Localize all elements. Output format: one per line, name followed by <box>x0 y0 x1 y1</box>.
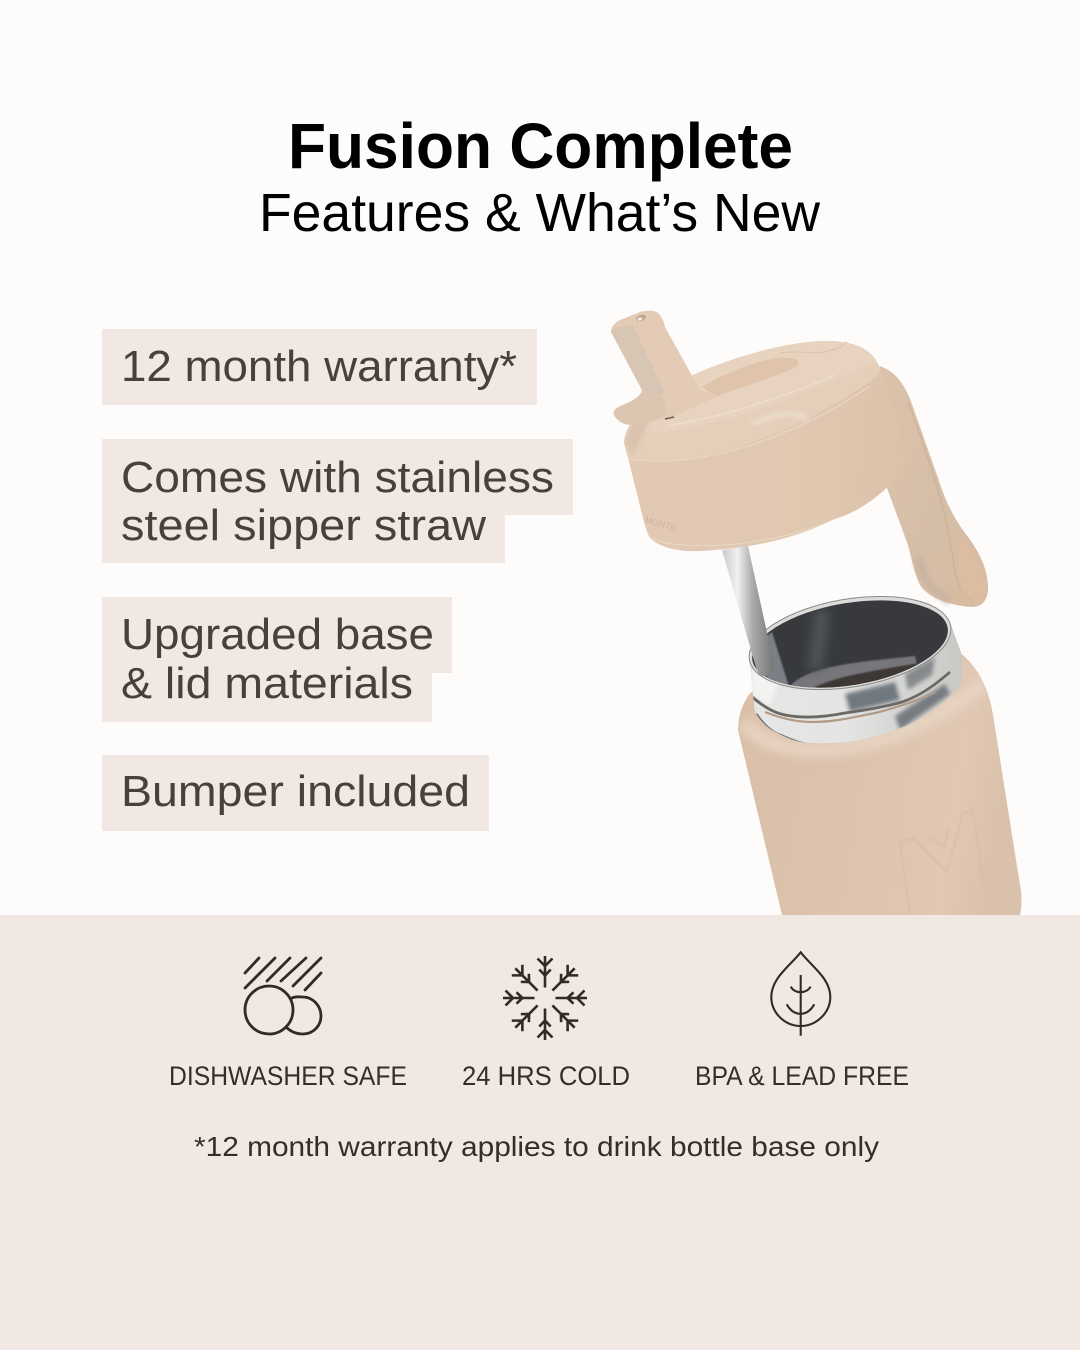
title <box>259 110 821 243</box>
feature: stainless steel sipper straw: Comes with stainless <box>121 453 554 502</box>
lid shoulder <box>620 340 890 460</box>
bottle body <box>738 640 1022 915</box>
icon: BPA and lead free leaf <box>771 952 830 1036</box>
feature: 12 month warranty: 12 month warranty* <box>121 342 517 391</box>
sipper slot <box>702 358 799 396</box>
embossed M logo <box>900 810 973 872</box>
icon: 24 hours cold snowflake <box>503 956 587 1040</box>
feature: 12 month warranty <box>102 329 537 405</box>
sipper spout <box>611 311 716 425</box>
panel: feature list <box>102 329 573 831</box>
feature: bumper included <box>102 755 489 831</box>
icon label: dishwasher safe: DISHWASHER SAFE <box>169 1061 407 1091</box>
panel: bottom band <box>0 915 1080 1350</box>
metal collar <box>749 622 964 745</box>
lid <box>624 341 887 552</box>
feature: stainless steel sipper straw: steel sipper straw <box>121 501 486 550</box>
feature: stainless steel sipper straw <box>102 439 573 563</box>
heading: Fusion Complete: Fusion Complete <box>288 110 793 182</box>
slot cover seam <box>781 342 847 353</box>
lid strap <box>870 366 988 607</box>
footnote: *12 month warranty applies to drink bottle base only <box>194 1131 879 1162</box>
subheading: Features and What's New: Features & What’s New <box>259 183 821 243</box>
feature: bumper included: Bumper included <box>121 767 470 816</box>
feature: upgraded base and lid materials <box>102 597 452 722</box>
feature: upgraded base and lid materials: Upgraded base <box>121 610 434 659</box>
product illustration: drink bottle with open lid <box>611 311 1022 915</box>
icon: dishwasher safe <box>245 958 321 1034</box>
feature: upgraded base and lid materials: & lid materials <box>121 659 413 708</box>
stainless steel straw <box>722 546 773 676</box>
lid brand mark: MONTII <box>643 514 676 533</box>
icon label: 24 hrs cold: 24 HRS COLD <box>462 1061 630 1091</box>
bottle interior <box>748 596 952 690</box>
icon label: BPA and lead free: BPA & LEAD FREE <box>695 1061 909 1091</box>
